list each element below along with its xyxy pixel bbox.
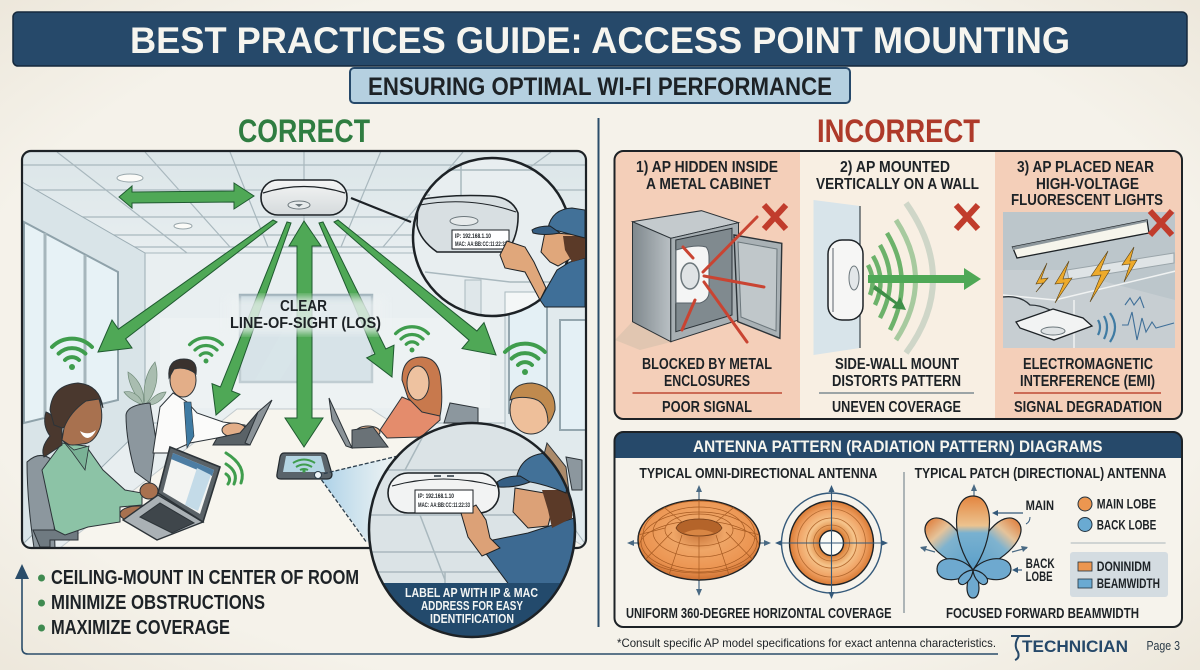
callout: back lobe <box>1012 556 1055 584</box>
laptop: woman <box>329 398 388 448</box>
bullet list: correct practices: CEILING-MOUNT IN CENTER OF ROOM <box>51 567 359 589</box>
caption: wall mount: DISTORTS PATTERN <box>832 373 961 390</box>
legend: lobes: MAIN LOBE <box>1097 496 1156 512</box>
caption: lights <box>1014 356 1162 416</box>
magnifier: AP label close-up bottom: ADDRESS FOR EASY <box>421 599 524 613</box>
caption: cabinet: BLOCKED BY METAL <box>642 356 772 373</box>
caption: uniform coverage: UNIFORM 360-DEGREE HORIZONTAL COVERAGE <box>626 605 892 622</box>
icon: x mark wall <box>956 205 978 229</box>
right wall and window <box>504 308 585 542</box>
back wall and screen <box>145 253 505 423</box>
label: clear line of sight: CLEAR <box>280 298 327 315</box>
caption: wall mount: SIDE-WALL MOUNT <box>835 356 959 373</box>
person: man at right <box>510 383 582 500</box>
icon: wifi centre right <box>396 327 428 352</box>
icon: x mark lights <box>1150 211 1172 235</box>
bullet list: correct practices: MAXIMIZE COVERAGE <box>51 617 230 639</box>
bullet list: correct practices <box>38 567 359 639</box>
panel: correct office scene <box>22 151 586 548</box>
laptop: woman in green <box>123 447 220 540</box>
connector line to magnifier <box>351 198 411 222</box>
IP and MAC sticker top <box>452 230 509 249</box>
column: wall mount: VERTICALLY ON A WALL <box>816 176 979 193</box>
logo: technician: TECHNICIAN <box>1022 637 1128 656</box>
legend: lobes <box>1071 496 1166 543</box>
title banner <box>13 12 1187 66</box>
column: metal cabinet: 1) AP HIDDEN INSIDE <box>636 159 778 176</box>
left wall with windows <box>22 182 145 545</box>
panel: antenna patterns <box>614 432 1182 627</box>
callout: back lobe: BACK <box>1026 556 1055 571</box>
page number: Page 3 <box>1146 639 1180 653</box>
icon: x mark cabinet <box>764 205 786 229</box>
arrow: line of sight centre <box>285 221 323 447</box>
plant <box>124 362 166 405</box>
caption: cabinet: POOR SIGNAL <box>662 399 752 416</box>
magnifier: AP label close-up top <box>413 158 571 322</box>
panel: incorrect scenarios <box>614 151 1182 419</box>
arrow: bottom bracket rising to panel <box>15 564 998 654</box>
vertical divider <box>598 118 600 627</box>
label: clear line of sight <box>228 297 384 333</box>
technician top <box>500 208 585 307</box>
column: wall mount: 2) AP MOUNTED <box>840 159 950 176</box>
column: fluorescent lights: 3) AP PLACED NEAR <box>1017 159 1154 176</box>
person: woman in sweater <box>356 357 478 438</box>
bullet list: correct practices: MINIMIZE OBSTRUCTIONS <box>51 592 265 614</box>
legend: beamwidth box: BEAMWIDTH <box>1097 576 1160 591</box>
ceiling <box>22 151 586 253</box>
chart: donut plan view <box>775 485 888 599</box>
person: man in white shirt <box>126 359 246 483</box>
caption: cabinet: ENCLOSURES <box>664 373 750 390</box>
ceiling access point <box>261 180 347 215</box>
laptop: man <box>213 400 272 445</box>
arrow: lateral coverage <box>119 183 254 209</box>
magnifier: AP label close-up bottom: IDENTIFICATION <box>430 612 514 626</box>
column: wall mount <box>814 159 981 355</box>
magnifier: AP label close-up bottom <box>369 423 578 639</box>
chart: 3D torus <box>627 485 771 596</box>
conference table <box>60 409 586 548</box>
wifi waves by laptop <box>226 453 242 484</box>
callout: back lobe: LOBE <box>1026 569 1053 584</box>
column: fluorescent lights: HIGH-VOLTAGE <box>1036 176 1139 193</box>
caption: forward beamwidth: FOCUSED FORWARD BEAMWIDTH <box>946 605 1139 622</box>
column: metal cabinet: A METAL CABINET <box>646 176 771 193</box>
antenna panel header: ANTENNA PATTERN (RADIATION PATTERN) DIAGRAMS <box>693 438 1102 456</box>
antenna panel header <box>614 432 1182 458</box>
magnifier: AP label close-up bottom: LABEL AP WITH IP & MAC <box>405 586 538 600</box>
arrow: line of sight far right <box>334 220 496 355</box>
caption: wall mount: UNEVEN COVERAGE <box>832 399 961 416</box>
icon: wifi right <box>505 344 545 375</box>
arrow: line of sight right <box>319 222 394 377</box>
heading: incorrect: INCORRECT <box>817 113 980 149</box>
blue magnifier cone <box>322 457 394 543</box>
person: woman in green shirt <box>27 383 158 548</box>
heading: correct: CORRECT <box>238 113 370 149</box>
arrow: line of sight left <box>212 222 291 415</box>
dashed callout lines <box>318 456 398 543</box>
caption: lights: ELECTROMAGNETIC <box>1023 356 1153 373</box>
IP and MAC sticker top: IP: 192.168.1.10 <box>455 233 491 240</box>
footnote: *Consult specific AP model specifications for exact antenna characteristics. <box>617 636 996 650</box>
callout: main lobe: MAIN <box>1026 498 1054 513</box>
subheading: omni: TYPICAL OMNI-DIRECTIONAL ANTENNA <box>639 465 878 482</box>
column: fluorescent lights: FLUORESCENT LIGHTS <box>1011 192 1163 209</box>
IP and MAC sticker bottom: MAC: AA:BB:CC:11:22:33 <box>418 502 470 509</box>
column: metal cabinet <box>614 151 800 419</box>
callout: main lobe <box>992 498 1054 524</box>
IP and MAC sticker bottom: IP: 192.168.1.10 <box>418 493 454 500</box>
caption: cabinet <box>632 356 782 416</box>
legend: beamwidth box <box>1070 552 1168 597</box>
caption: wall mount <box>819 356 974 416</box>
IP and MAC sticker bottom <box>415 490 473 513</box>
tablet with wifi <box>277 453 332 479</box>
caption: lights: SIGNAL DEGRADATION <box>1014 399 1162 416</box>
arrow: line of sight far left <box>98 220 277 352</box>
legend: lobes: BACK LOBE <box>1097 518 1156 532</box>
title banner: BEST PRACTICES GUIDE: ACCESS POINT MOUNTING <box>130 20 1070 61</box>
label: clear line of sight: LINE-OF-SIGHT (LOS) <box>230 315 381 332</box>
column: fluorescent lights <box>995 151 1182 419</box>
IP and MAC sticker top: MAC: AA:BB:CC:11:22:33 <box>455 241 507 248</box>
subtitle ribbon: ENSURING OPTIMAL WI-FI PERFORMANCE <box>368 73 832 101</box>
chart: patch antenna lobes <box>918 484 1028 598</box>
icon: wifi left <box>52 339 92 370</box>
icon: wifi centre left <box>190 338 222 363</box>
caption: lights: INTERFERENCE (EMI) <box>1020 373 1155 390</box>
legend: beamwidth box: DONINIDM <box>1097 559 1151 574</box>
